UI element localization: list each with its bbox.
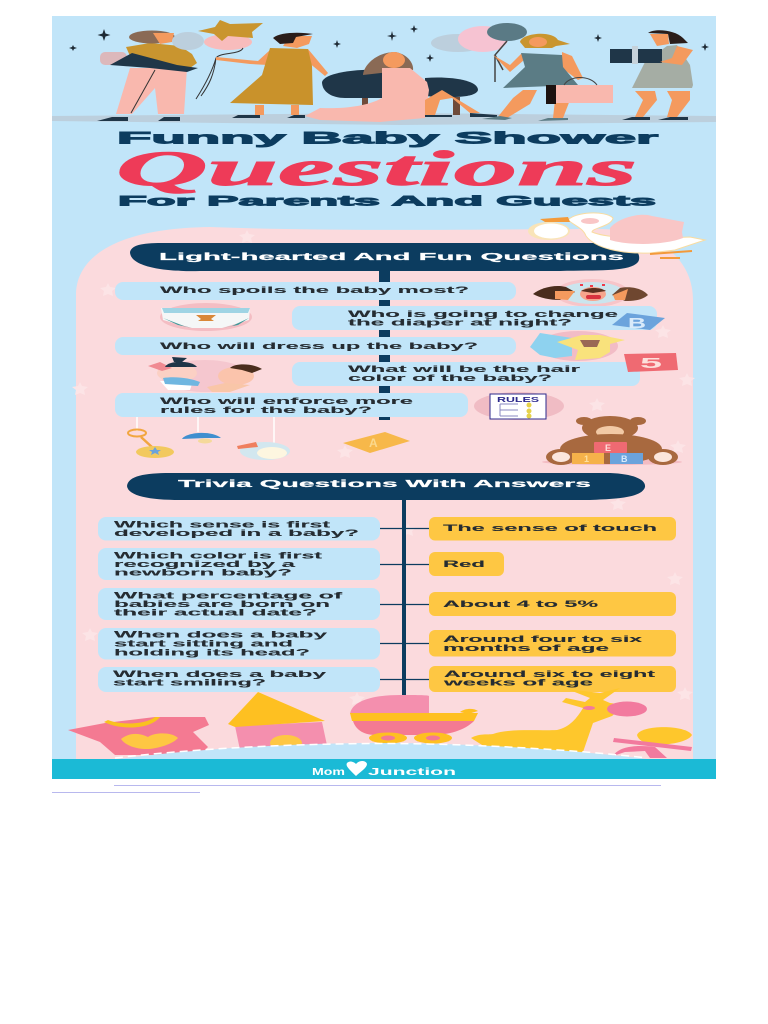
icon: diaper: [160, 303, 252, 331]
header illustration: party guests: [52, 20, 716, 125]
trivia answer 4: [429, 630, 676, 656]
bottom hump: [110, 743, 655, 760]
trivia question 3: [98, 588, 380, 620]
icon: pacifier: [182, 433, 221, 444]
pink content panel: [76, 227, 693, 760]
connector ticks: [380, 528, 429, 680]
icon: giraffe: [471, 688, 647, 752]
icon: toy house: [228, 692, 328, 751]
question 3: Who will dress up the baby?: [160, 341, 479, 351]
icon: pram: [350, 695, 478, 744]
trivia question 4: [98, 628, 380, 660]
dashed stitching: [115, 744, 647, 758]
question 4: color of the baby?: [348, 373, 553, 383]
question 5: rules for the baby?: [160, 405, 373, 415]
logo: [312, 761, 456, 778]
question 2: the diaper at night?: [348, 318, 573, 328]
title line 1: Funny Baby Shower: [117, 130, 660, 148]
trivia question 2: [98, 548, 380, 580]
trivia answer 3: About 4 to 5%: [443, 599, 598, 609]
trivia question 2: recognized by a: [114, 559, 297, 569]
sparkle stars: [69, 25, 709, 62]
trivia question 4: When does a baby: [114, 630, 329, 640]
section 1 header: [130, 243, 639, 271]
question 5: [115, 393, 468, 417]
trivia answer 3: [429, 592, 676, 616]
stork illustration: [528, 213, 705, 258]
trivia question 5: When does a baby: [113, 669, 328, 679]
section 2 header: [127, 473, 645, 500]
infographic background: [52, 16, 716, 779]
pale background stars: [72, 230, 695, 705]
trivia answer 2: Red: [443, 559, 485, 569]
icon: letter block B: B: [628, 315, 646, 332]
section 1 header: Light-hearted And Fun Questions: [159, 251, 624, 263]
icon: parents kissing baby: [533, 279, 648, 307]
question 1: Who spoils the baby most?: [160, 285, 470, 295]
question 5: Who will enforce more: [160, 396, 413, 406]
trivia answer 4: Around four to six: [443, 634, 644, 644]
woman with gift: [610, 30, 693, 120]
bottom toys: [68, 688, 692, 758]
trivia answer 1: The sense of touch: [443, 523, 658, 533]
icon: babies: [148, 357, 262, 392]
trivia question 2: Which color is first: [114, 550, 322, 560]
trivia question 4: start sitting and: [114, 638, 293, 648]
question 1: [115, 282, 516, 300]
icon: baby shirt: [68, 717, 209, 755]
pregnant woman on armchair: [305, 52, 497, 122]
icon: baby bottle: [237, 442, 290, 460]
trivia question 3: What percentage of: [114, 590, 345, 600]
icon: teddy bear: [542, 416, 682, 465]
section 1 connector: [379, 265, 390, 420]
source link lines: [52, 785, 661, 793]
icon: baby clothes: [530, 331, 625, 361]
trivia question 5: [98, 667, 380, 692]
section 2 connector: [402, 495, 406, 695]
icon: number block 5: [624, 353, 678, 372]
title: [116, 130, 660, 208]
title line 3: For Parents And Guests: [118, 192, 657, 208]
trivia question 3: babies are born on: [114, 599, 331, 609]
icon: letter block B: [612, 313, 665, 332]
question 4: What will be the hair: [348, 364, 581, 374]
question 2: Who is going to change: [348, 309, 618, 319]
icon: letter block A: A: [369, 436, 378, 450]
trivia answer 5: [429, 666, 676, 692]
woman with bouquet: [97, 30, 198, 121]
icon: number block 5: 5: [640, 355, 662, 372]
question 3: [115, 337, 516, 355]
icon: rules checklist: [474, 392, 564, 420]
trivia question 4: holding its head?: [114, 647, 311, 657]
trivia question 3: their actual date?: [114, 608, 318, 618]
trivia question 2: newborn baby?: [114, 568, 293, 578]
question 2: [292, 306, 657, 330]
floor band: [52, 113, 716, 125]
icon: duck rattle: [613, 727, 692, 758]
trivia question 1: developed in a baby?: [114, 528, 360, 538]
woman in mustard dress: [216, 33, 328, 118]
footer band: [52, 759, 716, 779]
title line 2: Questions: Questions: [116, 140, 637, 196]
trivia question 1: [98, 517, 380, 540]
trivia question 5: start smiling?: [113, 678, 267, 688]
trivia answer 2: [429, 552, 504, 576]
trivia answer 5: weeks of age: [441, 678, 593, 688]
question 4: [292, 362, 640, 386]
icon: rattle: [128, 430, 174, 458]
logo: Mom: [312, 767, 345, 778]
logo: Junction: [368, 767, 456, 778]
trivia answer 4: months of age: [443, 643, 609, 653]
hanging toys: [128, 417, 290, 460]
trivia answer 1: [429, 517, 676, 540]
icon: teddy bear: B: [621, 454, 628, 464]
balloons: [172, 20, 263, 99]
icon: letter block A: [343, 432, 410, 453]
section 2 header: Trivia Questions With Answers: [178, 478, 591, 490]
trivia answer 5: Around six to eight: [444, 669, 655, 679]
icon: teddy bear: E: [605, 443, 611, 453]
icon: teddy bear: 1: [584, 454, 589, 464]
woman with balloons and bag: [431, 23, 613, 121]
icon: rules checklist: RULES: [497, 397, 540, 404]
trivia question 1: Which sense is first: [114, 519, 330, 529]
